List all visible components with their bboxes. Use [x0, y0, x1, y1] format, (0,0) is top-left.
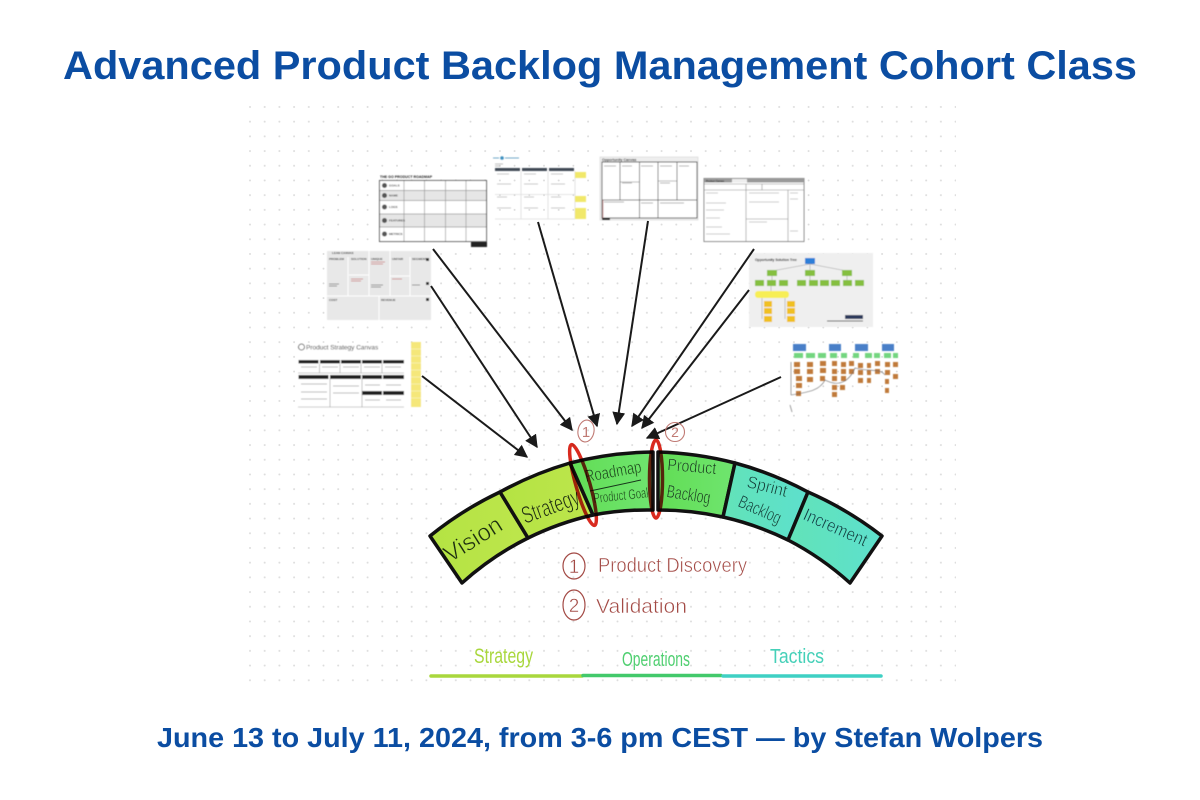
- thumbnail: product strategy canvas: Product Strategy Canvas: [306, 344, 379, 352]
- thumbnail: lean canvas: SEGMENT: [412, 257, 427, 261]
- thumbnail: lean canvas: [327, 251, 431, 320]
- arrow: strategy canvas to strategy: [422, 376, 527, 457]
- segment: sprint backlog: Sprint: [745, 472, 790, 501]
- segment: sprint backlog: Backlog: [735, 491, 785, 528]
- arrow: solution tree to validation: [642, 290, 749, 428]
- scale: operations: Operations: [622, 649, 690, 671]
- thumbnail: product roadmap: LOGS: [389, 205, 398, 209]
- segment: increment: [788, 492, 882, 583]
- thumbnail: product roadmap: THE GO PRODUCT ROADMAP: [380, 175, 433, 179]
- scale: strategy: Strategy: [474, 645, 533, 668]
- segment: roadmap and product goal: Roadmap: [583, 457, 643, 486]
- legend: validation: Validation: [596, 596, 687, 618]
- title: Advanced Product Backlog Management Cohort Class: [63, 44, 1137, 88]
- thumbnail: product roadmap: [380, 175, 487, 247]
- thumbnail: opportunity canvas: Opportunity Canvas: [602, 158, 636, 162]
- segment: product backlog: Product: [667, 455, 717, 478]
- thumbnail: assumption table: [493, 156, 586, 219]
- thumbnail: product roadmap: FEATURES: [389, 218, 405, 222]
- scale: tactics: Tactics: [770, 646, 824, 668]
- thumbnail: product roadmap: GOALS: [389, 184, 400, 188]
- arrow: assumption table to roadmap: [538, 222, 597, 426]
- arrow: opportunity canvas to roadmap: [617, 221, 648, 424]
- legend: product discovery: Product Discovery: [598, 555, 747, 577]
- segment: vision: Vision: [439, 511, 507, 568]
- thumbnail: lean canvas: UNFAIR: [392, 257, 404, 261]
- arrow: lean canvas to strategy: [431, 286, 537, 447]
- thumbnail: lean canvas: PROBLEM: [329, 257, 345, 261]
- thumbnail: opportunity solution tree: Opportunity Solution Tree: [755, 258, 797, 262]
- thumbnail: story map: [790, 344, 898, 412]
- thumbnail: product vision board: [704, 178, 804, 242]
- thumbnail: opportunity solution tree: [749, 253, 873, 327]
- arrow: product roadmap to discovery: [433, 249, 572, 430]
- badge: 1 above arc: 1: [582, 424, 590, 441]
- thumbnail: lean canvas: UNIQUE: [371, 257, 383, 261]
- arc diagram: product backlog stages: [430, 452, 882, 583]
- segment: roadmap and product goal: Product Goal: [593, 484, 649, 506]
- red marker: validation boundary: [650, 440, 662, 518]
- segment: increment: Increment: [800, 504, 871, 550]
- thumbnail: product roadmap: METRICS: [389, 232, 402, 236]
- legend: validation: [563, 590, 687, 620]
- badge: 1 above arc: [576, 419, 596, 443]
- thumbnail: lean canvas: LEAN CANVAS: [332, 251, 353, 255]
- legend: product discovery: [563, 553, 747, 579]
- thumbnail: lean canvas: COST: [329, 298, 338, 302]
- legend: validation: 2: [569, 596, 579, 617]
- thumbnail: product strategy canvas: [298, 342, 422, 407]
- thumbnail: product roadmap: NAME: [389, 194, 398, 198]
- arrow: vision board to roadmap: [632, 249, 754, 426]
- badge: 2 above arc: [666, 422, 684, 442]
- segment: roadmap and product goal: [570, 452, 653, 515]
- segment: product backlog: Backlog: [665, 481, 712, 508]
- legend: product discovery: 1: [569, 557, 579, 578]
- red marker: product discovery boundary: [565, 443, 601, 527]
- subtitle: dates and author: June 13 to July 11, 2024, from 3-6 pm CEST — by Stefan Wolpers: [157, 722, 1043, 753]
- badge: 2 above arc: 2: [671, 424, 679, 440]
- thumbnail: opportunity canvas: [600, 157, 698, 220]
- segment: product backlog: [658, 452, 735, 517]
- segment: vision: [430, 492, 528, 583]
- segment: strategy: [500, 463, 593, 538]
- arrow: story map to validation: [647, 377, 781, 438]
- segment: sprint backlog: [723, 463, 808, 540]
- thumbnail: lean canvas: REVENUE: [381, 298, 396, 302]
- thumbnail: lean canvas: SOLUTION: [351, 257, 366, 261]
- thumbnail: product vision board: Product Canvas: [706, 180, 725, 183]
- scale: operations: [583, 649, 721, 676]
- segment: strategy: Strategy: [518, 484, 583, 530]
